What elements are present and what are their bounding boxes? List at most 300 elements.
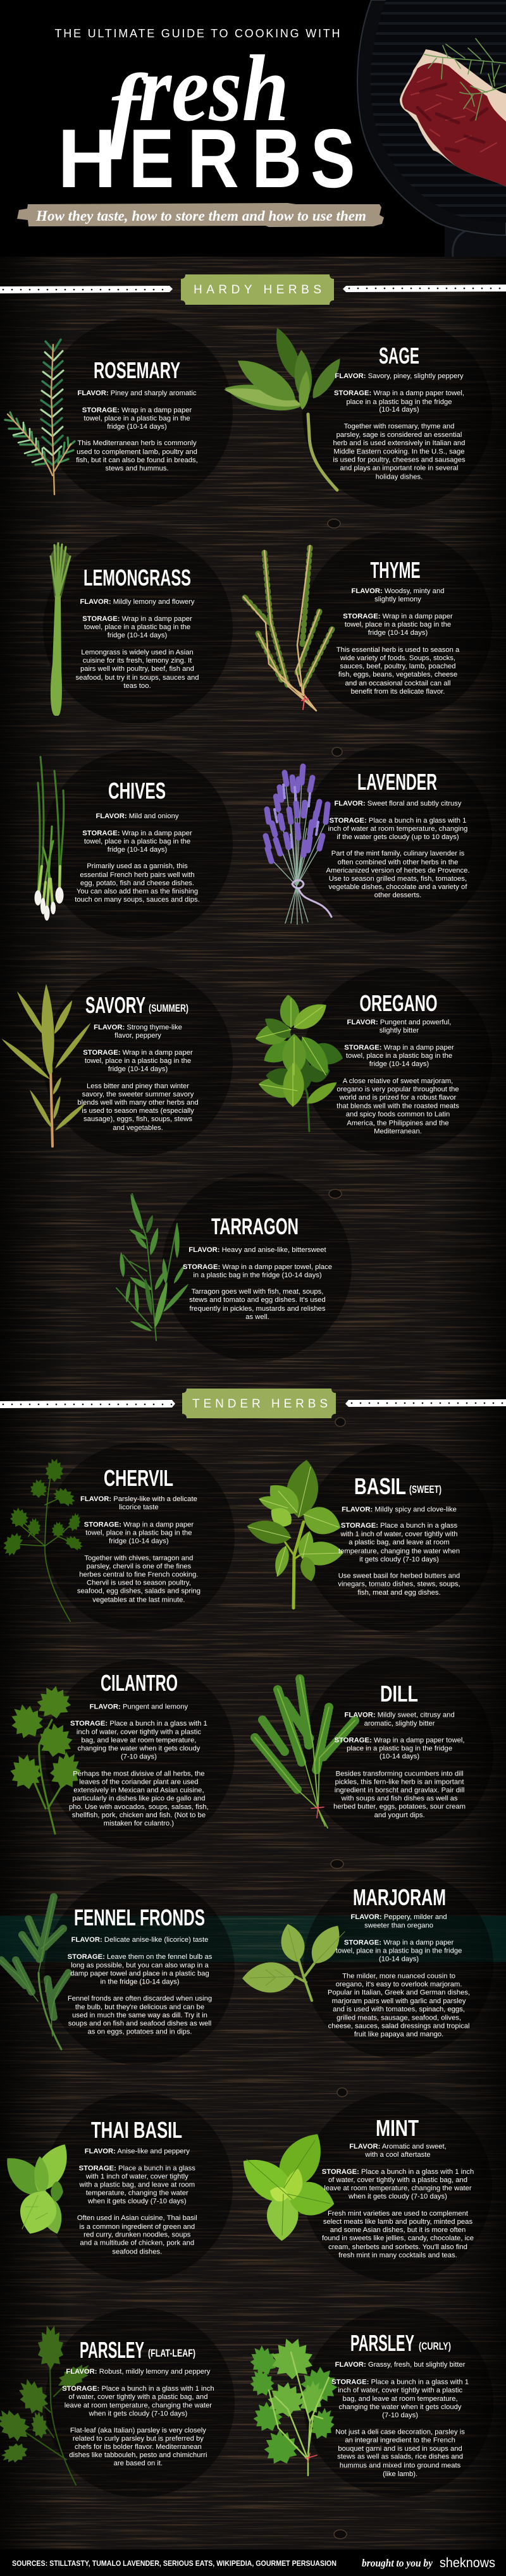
description: STORAGE: Wrap in a damp paper towel, place (183, 1263, 332, 1271)
description: stews and hummus. (105, 465, 169, 472)
title: CHIVES (108, 778, 166, 804)
description: FLAVOR: Pungent and powerful, (347, 1019, 451, 1026)
title: HERBS: E (129, 112, 174, 205)
description: and yogurt dips. (374, 1812, 425, 1819)
description: stews as well as salads, rice dishes and (337, 2453, 463, 2461)
description: Mediterranean. (374, 1128, 422, 1136)
description: when it gets cloudy (7-10 days) (89, 2410, 187, 2418)
description: cheese, sauces, salad dressings and tropical (328, 2022, 470, 2030)
description: slightly lemony (374, 596, 421, 603)
description: changing the water when it gets cloudy (77, 1745, 201, 1753)
description: seafood, egg dishes, salads and spring (77, 1587, 201, 1595)
description: long as possible, but you can also wrap in a (71, 1961, 209, 1969)
description: sausage), eggs, fish, soups, stews (83, 1115, 192, 1123)
description (69, 1703, 209, 1827)
description (338, 1506, 460, 1597)
card: fennel fronds (0, 1875, 235, 2065)
description: Together with chives, tarragon and (84, 1554, 193, 1562)
description: towel, place in a plastic bag in the (84, 838, 190, 845)
description: oregano is very popular throughout the (336, 1086, 459, 1093)
description: STORAGE: Wrap in a damp paper (84, 1521, 194, 1529)
icon: rosemary sprig (5, 340, 75, 494)
description: place in a plastic bag in the fridge (347, 398, 452, 406)
card: summer savory (0, 967, 233, 1156)
description: ingredient in borscht and gravlax. Pair dill (335, 1786, 464, 1794)
title: HERBS: R (187, 113, 239, 205)
description: STORAGE: Wrap in a damp paper (83, 1049, 193, 1057)
description: FLAVOR: Strong thyme-like (94, 1024, 182, 1031)
description: Not just a deli case decoration, parsley is (335, 2428, 465, 2436)
description: Use to season grilled meats, fish, tomatoes, (329, 875, 467, 883)
description: with soups and fish dishes as well as (341, 1794, 458, 1802)
description: and is used with tomatoes, spinach, eggs, (333, 2006, 465, 2013)
card: lemongrass (43, 534, 233, 723)
icon: chervil sprig (0, 1459, 85, 1621)
description: when it gets cloudy (7-10 days) (348, 2193, 447, 2200)
description: oregano, it's easy to overlook marjoram. (336, 1981, 462, 1989)
description: (7-10 days) (382, 2412, 418, 2419)
description: and plays an important role in several (340, 465, 458, 472)
subtitle banner (17, 203, 384, 227)
description (331, 2361, 469, 2478)
title: CHERVIL (104, 1465, 173, 1491)
icon: tarragon sprig (116, 1193, 190, 1340)
icon: thyme bundle (244, 546, 332, 711)
title: fresh: f (109, 55, 149, 160)
description: (7-10 days) (121, 1753, 157, 1761)
description: herbes central to fine French cooking. (79, 1571, 199, 1578)
steak (400, 49, 506, 187)
icon: flat-leaf parsley sprig (0, 2326, 95, 2485)
icon: mint leaves (233, 2125, 338, 2242)
description: inch of water, cover tightly with a plastic (338, 2387, 462, 2395)
description: blends well with many other herbs and (77, 1099, 199, 1107)
description: temperature, changing the water (86, 2189, 188, 2197)
description: place in a plastic bag in the fridge (347, 1745, 452, 1753)
card: rosemary (5, 317, 233, 507)
description: towel, place in a plastic bag in the (84, 623, 190, 631)
description: FLAVOR: Peppery, milder and (351, 1913, 447, 1921)
description: bag, and leave at room temperature, (81, 1737, 196, 1745)
description: frequently in pickles, mustards and relishes (189, 1305, 326, 1313)
description: inch of water, cover tightly with a plastic (77, 1729, 201, 1736)
description: A close relative of sweet marjoram, (343, 1077, 453, 1085)
description: of water, cover tightly with a plastic bag, and (68, 2393, 207, 2401)
title: PARSLEY (350, 2330, 414, 2356)
card: sweet basil (244, 1444, 493, 1633)
title: PARSLEY (80, 2337, 144, 2363)
description: towel, place in a plastic bag in the (346, 1052, 452, 1060)
description (62, 2368, 214, 2467)
description: (10-14 days) (379, 1955, 419, 1963)
card: curly parsley (246, 2308, 493, 2498)
description: used in much the same way as dill. Try it in (72, 2012, 207, 2020)
icon: oregano sprig (253, 994, 345, 1131)
description (333, 1711, 466, 1819)
description: and spicy foods common to Latin (346, 1111, 450, 1119)
description: found in sweets like jellies, candy, chocolate, ice (322, 2235, 474, 2242)
description: FLAVOR: Piney and sharply aromatic (77, 389, 197, 397)
description: FLAVOR: Mild and oniony (96, 813, 179, 820)
title: THYME (371, 557, 420, 583)
card: mint (233, 2092, 492, 2282)
description: changing the water when it gets cloudy (339, 2403, 462, 2411)
description: inch of water at room temperature, changing (328, 825, 467, 833)
description: is a common ingredient of green and (79, 2223, 195, 2231)
title: OREGANO (359, 990, 438, 1016)
description: of water, cover tightly with a plastic bag, and (328, 2176, 467, 2184)
card: oregano (253, 967, 492, 1156)
description: FLAVOR: Sweet floral and subtly citrusy (334, 800, 462, 807)
description: temperature, changing the water when (338, 1547, 460, 1555)
description: FLAVOR: Pungent and lemony (90, 1703, 188, 1710)
credit: brought to you by (362, 2557, 433, 2569)
description: bag, and leave at room temperature, (343, 2395, 458, 2403)
description: soups and on fish and seafood dishes as well (68, 2020, 211, 2028)
description: herbed butter, eggs, potatoes, sour cream (333, 1803, 466, 1810)
title: DILL (380, 1681, 418, 1707)
card: flat-leaf parsley (0, 2308, 235, 2498)
description: Tarragon goes well with fish, meat, soups, (192, 1288, 323, 1296)
description (68, 1936, 213, 2036)
description: fresh mint in many cocktails and teas. (338, 2252, 457, 2259)
description: STORAGE: Place a bunch in a glass with 1 (331, 2379, 469, 2386)
description: leave at room temperature, changing the water (65, 2401, 212, 2409)
description: with 1 inch of water, cover tightly with (340, 1530, 458, 1538)
description: are based on it. (114, 2460, 163, 2467)
icon: marjoram sprig (242, 1920, 347, 2001)
title: (SUMMER) (149, 1002, 188, 1014)
description: fish, meat and egg dishes. (357, 1589, 441, 1597)
description: and some Asian dishes, but it is more often (330, 2226, 466, 2234)
description (183, 1246, 332, 1321)
description: extensively in Mexican and Asian cuisine, (73, 1786, 204, 1794)
description: licorice taste (119, 1504, 159, 1511)
description: STORAGE: Wrap in a damp paper (82, 407, 192, 414)
description: towel, place in a plastic bag in the (83, 415, 190, 422)
description: Lemongrass is widely used in Asian (81, 649, 194, 656)
description: FLAVOR: Mildly spicy and clove-like (342, 1506, 457, 1514)
description: STORAGE: Wrap in a damp paper (344, 1044, 454, 1052)
description: and an occasional cocktail can all (345, 680, 450, 687)
description: STORAGE: Place a bunch in a glass (79, 2165, 195, 2173)
description: STORAGE: Wrap in a damp paper (344, 1939, 454, 1946)
icon: lavender bouquet (266, 766, 331, 924)
description: bouquet garni and is used in soups and (338, 2445, 462, 2453)
description: You can also add them as the finishing (77, 888, 198, 895)
description: Primarily used as a garnish, this (87, 862, 188, 870)
title: SAGE (379, 343, 419, 369)
description: egg, potato, fish and cheese dishes. (80, 880, 194, 887)
description (322, 2143, 474, 2259)
icon: basil sprig (244, 1457, 345, 1608)
description: STORAGE: Leave them on the fennel bulb as (68, 1953, 213, 1961)
title: HERBS: B (252, 111, 302, 205)
description (75, 598, 199, 690)
description: fish, eggs, beans, vegetables, cheese (338, 671, 457, 678)
description: parsley, sage is considered an essential (336, 431, 462, 439)
description: teas too. (123, 682, 151, 690)
description: America, the Philippines and the (347, 1119, 449, 1127)
description: pickles, this fern-like herb is an important (335, 1778, 464, 1786)
title: BASIL (354, 1473, 406, 1499)
description: vegetable dishes, chocolate and a variety of (329, 883, 467, 891)
description (336, 587, 460, 696)
description: world and is prized for a robust flavor (339, 1094, 456, 1101)
description: cuisine for its fresh, lemony zing. It (83, 657, 192, 665)
description (77, 2148, 197, 2255)
description: is used for poultry, cheeses and sausages (333, 457, 466, 464)
description: FLAVOR: Mildly sweet, citrusy and (344, 1711, 455, 1719)
title: LEMONGRASS (83, 565, 191, 591)
description: vegetables at the last minute. (92, 1597, 185, 1604)
description: towel, place in a plastic bag in the (345, 621, 451, 629)
section header: hardy herbs: HARDY HERBS (194, 283, 321, 297)
description: and a multitude of chicken, pork and (80, 2240, 194, 2247)
description: STORAGE: Place a bunch in a glass with 1 inch (62, 2385, 214, 2393)
description: an integral ingredient to the French (345, 2437, 455, 2444)
header: black panel (0, 0, 506, 257)
description: FLAVOR: Savory, piney, slightly peppery (335, 372, 464, 380)
description: Fennel fronds are often discarded when using (68, 1995, 212, 2003)
description: used to complement lamb, poultry and (77, 448, 197, 456)
description: herb and is used extensively in Italian and (333, 439, 465, 447)
description: FLAVOR: Robust, mildly lemony and peppery (66, 2368, 211, 2376)
description: hummus and mixed into ground meats (340, 2462, 461, 2470)
description: pho. Use with avocados, soups, salsas, fish, (69, 1803, 209, 1811)
title: (SWEET) (409, 1483, 441, 1495)
description: (like lamb). (383, 2470, 417, 2478)
description: particularly in dishes like pico de gallo and (72, 1794, 205, 1802)
title: fresh: resh (139, 36, 289, 141)
rosemary garnish (424, 39, 506, 120)
description: fridge (10-14 days) (108, 1065, 168, 1073)
icon: thai basil leaves (0, 2138, 77, 2240)
description: it gets cloudy (7-10 days) (359, 1555, 439, 1563)
description: FLAVOR: Delicate anise-like (licorice) taste (71, 1936, 208, 1944)
description: Together with rosemary, thyme and (344, 422, 454, 430)
card: sage (222, 319, 492, 508)
title: CILANTRO (101, 1670, 178, 1696)
icon: savory sprig (0, 984, 93, 1146)
title: intro line: THE ULTIMATE GUIDE TO COOKING WITH (54, 27, 340, 40)
icon: chives bunch (34, 757, 64, 921)
credit (362, 2556, 495, 2570)
description: FLAVOR: Grassy, fresh, but slightly bitter (335, 2361, 466, 2369)
card: tarragon (116, 1172, 352, 1362)
description: as well. (245, 1313, 269, 1321)
description: STORAGE: Wrap in a damp paper towel, (334, 389, 464, 397)
description: with a cool aftertaste (364, 2151, 431, 2159)
icon: sage sprig (222, 324, 346, 490)
description: in the fridge (10-14 days) (100, 1978, 180, 1985)
card: thyme (244, 531, 492, 721)
description: towel, place in a plastic bag in the (85, 1057, 191, 1065)
icon: lemongrass stalk (50, 543, 71, 716)
icon: fennel fronds (0, 1897, 70, 2049)
title: HERBS: S (311, 113, 355, 205)
description: The milder, more nuanced cousin to (342, 1973, 455, 1980)
description (77, 1024, 199, 1132)
description: vinegars, tomato dishes, stews, soups, (338, 1581, 460, 1588)
description: shellfish, pork, chicken and fish. (Not to be (72, 1812, 206, 1819)
title: ROSEMARY (94, 357, 180, 383)
description: pairs well with poultry, beef, fish and (80, 665, 194, 673)
section header: tender herbs: TENDER HERBS (192, 1397, 328, 1411)
card: chervil (0, 1442, 235, 1632)
description: fridge (10-14 days) (109, 1538, 169, 1545)
description: with 1 inch of water, cover tightly (85, 2173, 188, 2180)
section header: tender herbs (0, 1389, 506, 1418)
description: grilled meats, sausage, seafood, olives, (336, 2015, 461, 2022)
description (336, 1019, 459, 1136)
description: Perhaps the most divisive of all herbs, the (73, 1770, 205, 1777)
description (328, 1913, 470, 2039)
description: benefit from its delicate flavor. (351, 688, 445, 696)
description: Less bitter and piney than winter (87, 1083, 189, 1090)
description: FLAVOR: Mildly lemony and flowery (80, 598, 195, 606)
description: This essential herb is used to season a (336, 646, 460, 654)
description: marjoram pairs well with garlic and parsley (332, 1997, 466, 2005)
title: MARJORAM (353, 1884, 446, 1910)
card: cilantro (5, 1659, 235, 1849)
description: STORAGE: Wrap in a damp paper towel, (335, 1737, 465, 1745)
title: MINT (376, 2115, 419, 2141)
description: in a plastic bag in the fridge (10-14 days) (193, 1272, 322, 1279)
description: a plastic bag, and leave at room (349, 1539, 450, 1547)
description: parsley, chervil is one of the fines (87, 1562, 192, 1570)
description: sauces, beef, poultry, lamb, poached (340, 663, 456, 670)
section header: hardy herbs (0, 274, 506, 305)
title: THAI BASIL (91, 2117, 182, 2143)
icon: cilantro sprig (5, 1684, 85, 1834)
description: cream, sherbets and sorbets. You'll also find (328, 2243, 467, 2251)
description: flavor, peppery (114, 1032, 161, 1040)
title: LAVENDER (357, 769, 437, 795)
description: STORAGE: Wrap in a damp paper (82, 830, 192, 837)
description: Popular in Italian, Greek and German dishes, (328, 1989, 470, 1997)
title: FENNEL FRONDS (74, 1904, 205, 1930)
description (77, 1495, 201, 1604)
title: (CURLY) (419, 2340, 451, 2352)
description: related to curly parsley but is preferred by (73, 2435, 204, 2443)
description: fridge (10-14 days) (107, 423, 167, 431)
description: fruit like papaya and mango. (354, 2031, 443, 2039)
description: towel, place in a plastic bag in the fridge (336, 1947, 462, 1955)
description: leaves of the coriander plant are used (79, 1778, 199, 1786)
description: fish, but it can also be found in breads, (76, 457, 198, 464)
description: This Mediterranean herb is commonly (77, 439, 197, 447)
description: with a plastic bag, and leave at room (78, 2181, 195, 2189)
title: fresh (109, 36, 289, 160)
description: aromatic, slightly bitter (364, 1720, 435, 1727)
description: chefs for its bolder flavor. Mediterranean (75, 2443, 202, 2451)
description: the bulb, but they're delicious and can be (75, 2004, 204, 2011)
description: touch on many soups, sauces and dips. (75, 896, 200, 904)
card: dill (255, 1657, 493, 1846)
description: fridge (10-14 days) (108, 846, 167, 854)
description: FLAVOR: Parsley-like with a delicate (80, 1495, 197, 1503)
description: as on eggs, potatoes and in dips. (87, 2028, 192, 2036)
description: Besides transforming cucumbers into dill (336, 1770, 464, 1777)
card: chives (34, 749, 233, 939)
description: Flat-leaf (aka Italian) parsley is very closely (70, 2427, 206, 2434)
sources: SOURCES: STILLTASTY, TUMALO LAVENDER, SERIOUS EATS, WIKIPEDIA, GOURMET PERSUASION (12, 2559, 336, 2568)
description: holiday dishes. (376, 473, 423, 481)
description: damp paper towel and place in a plastic bag (70, 1970, 209, 1977)
description: STORAGE: Wrap in a damp paper (82, 615, 192, 623)
title: HERBS: H (58, 112, 116, 205)
description: wide variety of foods. Soups, stocks, (340, 654, 455, 662)
description (326, 800, 469, 899)
title: HERBS (58, 111, 355, 205)
subtitle banner: How they taste, how to store them and how to use them (35, 208, 366, 224)
description: Americanized version of herbes de Provence. (326, 867, 469, 874)
description: fridge (10-14 days) (368, 629, 428, 637)
card: lavender (266, 744, 492, 933)
credit: sheknows (440, 2556, 495, 2570)
description: STORAGE: Place a bunch in a glass with 1 (330, 817, 466, 825)
description: if the water gets cloudy (up to 10 days) (336, 833, 459, 841)
description (333, 372, 466, 481)
description: is used to season meats (especially (82, 1107, 194, 1115)
icon: dill bundle (255, 1677, 355, 1828)
description: slightly bitter (379, 1027, 419, 1034)
description (76, 389, 198, 472)
description: STORAGE: Place a bunch in a glass (341, 1522, 458, 1530)
description: essential French herb pairs well with (80, 871, 195, 879)
description: that blends well with the roasted meats (336, 1103, 459, 1110)
description: and vegetables. (113, 1124, 163, 1132)
description: seafood dishes. (112, 2248, 162, 2255)
description: FLAVOR: Heavy and anise-like, bittersweet (188, 1246, 327, 1254)
icon: curly parsley bunch (246, 2339, 342, 2475)
description: Often used in Asian cuisine, Thai basil (77, 2214, 197, 2222)
description: savory, the sweeter summer savory (82, 1091, 194, 1098)
description: red curry, drunken noodles, soups (83, 2231, 191, 2239)
description (75, 813, 200, 904)
description: select meats like lamb and poultry, minted peas (323, 2218, 472, 2226)
title: (FLAT-LEAF) (148, 2347, 195, 2359)
description: Use sweet basil for herbed butters and (338, 1572, 460, 1579)
title: TARRAGON (211, 1213, 299, 1239)
title: SAVORY (85, 992, 145, 1018)
description: Chervil is used to season poultry, (87, 1579, 191, 1586)
description: other desserts. (374, 892, 421, 899)
card: thai basil (0, 2092, 233, 2282)
description: mistaken for culantro.) (104, 1820, 174, 1827)
description: STORAGE: Place a bunch in a glass with 1 (70, 1720, 207, 1727)
description: fridge (10-14 days) (108, 632, 167, 639)
description: stews and tomato and egg dishes. It's used (189, 1296, 326, 1304)
image: cast iron pan with steak and rosemary (357, 0, 506, 257)
description: (10-14 days) (379, 406, 419, 414)
description: Middle Eastern cooking. In the U.S., sage (334, 448, 464, 455)
description: fridge (10-14 days) (369, 1060, 429, 1068)
description: towel, place in a plastic bag in the (85, 1530, 192, 1537)
description: FLAVOR: Anise-like and peppery (85, 2148, 190, 2156)
description: sweeter than oregano (364, 1922, 433, 1930)
description: STORAGE: Wrap in a damp paper (343, 613, 453, 620)
description: when it gets cloudy (7-10 days) (87, 2198, 187, 2205)
description: FLAVOR: Woodsy, minty and (352, 587, 444, 595)
footer bar (0, 2549, 506, 2576)
description: Fresh mint varieties are used to complement (328, 2210, 469, 2217)
description: (10-14 days) (379, 1753, 419, 1760)
description: Part of the mint family, culinary lavender is (331, 850, 465, 857)
description: often combined with other herbs in the (338, 859, 458, 866)
description: leave at room temperature, changing the water (324, 2185, 472, 2192)
